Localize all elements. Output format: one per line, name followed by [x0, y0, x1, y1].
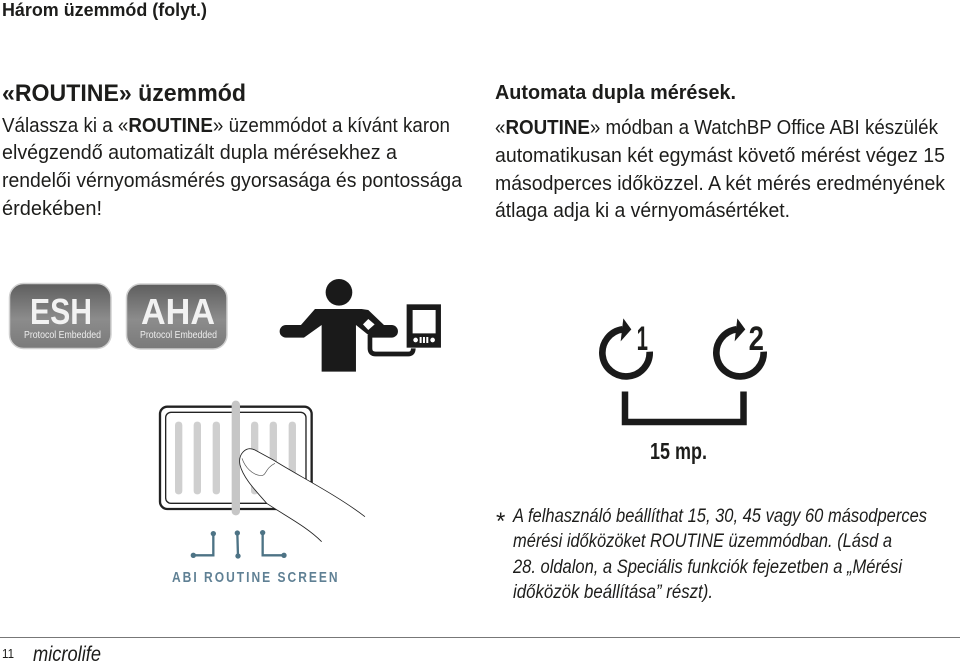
page number: 11	[2, 646, 14, 661]
left body text: rendelői vérnyomásmérés gyorsasága és pontossága	[2, 170, 463, 192]
icon: cycle 1	[602, 318, 650, 376]
switch label: ABI ROUTINE SCREEN	[172, 569, 338, 585]
footnote text: mérési időközöket ROUTINE üzemmódban. (Lásd a	[513, 531, 892, 552]
footnote text: időközök beállítása” részt).	[513, 582, 713, 603]
left body text: érdekében!	[2, 198, 102, 220]
icon: cycle 2: 2	[749, 320, 764, 358]
device switch frame	[160, 407, 312, 509]
right body text: «ROUTINE» módban a WatchBP Office ABI készülék	[495, 117, 939, 139]
footnote asterisk: *	[496, 508, 505, 535]
footer rule	[0, 637, 960, 638]
illustration: finger pressing ROUTINE switch	[160, 401, 383, 559]
right body text: másodperces időközzel. A két mérés eredményének	[495, 173, 946, 195]
footnote text	[512, 506, 927, 603]
left text block: ROUTINE mode	[2, 80, 463, 220]
badge: ESH protocol embedded	[10, 284, 111, 348]
finger	[240, 449, 383, 542]
right text block: automatic double measurements	[495, 82, 946, 222]
badge: ESH protocol embedded: Protocol Embedded	[24, 330, 101, 341]
left body text: elvégzendő automatizált dupla mérésekhez a	[2, 142, 398, 164]
switch ridges	[175, 422, 296, 494]
icon: cycle 2	[716, 318, 764, 376]
left body text: Válassza ki a «ROUTINE» üzemmódot a kívánt karon	[2, 115, 450, 137]
badge: ESH protocol embedded: ESH	[30, 291, 92, 332]
left heading: «ROUTINE» üzemmód	[2, 80, 246, 107]
page heading: Három üzemmód (folyt.)	[2, 0, 207, 20]
right body text	[495, 117, 946, 222]
left body text	[2, 115, 463, 220]
icon: person with cuff and monitor	[280, 279, 441, 372]
badge: AHA protocol embedded: Protocol Embedded	[140, 330, 217, 341]
right body text: automatikusan két egymást követő mérést végez 15	[495, 145, 945, 167]
right body text: átlaga adja ki a vérnyomásértéket.	[495, 200, 790, 222]
bracket: interval between measurements	[625, 392, 744, 422]
badge: AHA protocol embedded: AHA	[141, 291, 215, 332]
mode selector symbols	[193, 533, 284, 556]
right heading: Automata dupla mérések.	[495, 82, 736, 104]
icon: cycle 1: 1	[637, 320, 648, 358]
badge: AHA protocol embedded	[126, 284, 227, 349]
footnote text: 28. oldalon, a Speciális funkciók fejezetben a „Mérési	[512, 557, 903, 578]
interval label: 15 mp.	[650, 438, 707, 464]
